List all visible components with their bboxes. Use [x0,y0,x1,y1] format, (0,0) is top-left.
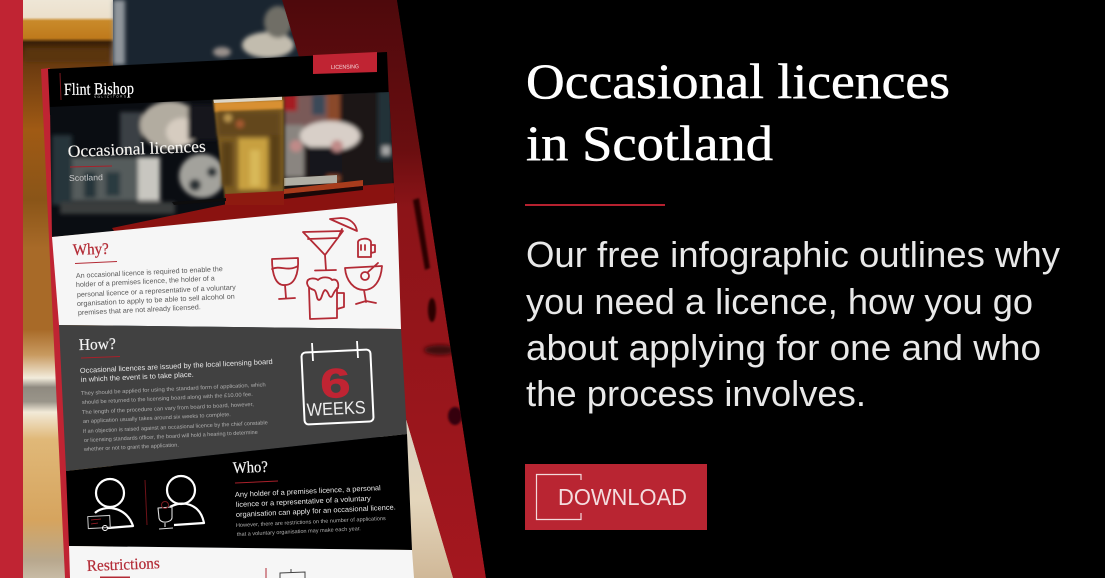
divider [145,480,147,525]
description text: you need a licence, how you go [526,281,1033,322]
description text: Our free infographic outlines why [526,234,1060,275]
infographic document preview [41,52,414,578]
how detail text: If an objection is raised against an occasional licence by the chief constable [83,420,268,435]
heading: who: Who? [233,459,268,477]
why body text: personal licence or a representative of a voluntary [77,284,236,299]
logo: Flint Bishop [60,73,134,100]
how detail text: or licensing standards officer, the board will hold a hearing to determine [84,430,258,444]
red accent lines in document [75,262,278,483]
why body text: organisation to apply to be able to sell alcohol on [77,294,235,308]
how detail text [81,382,268,453]
why body text [76,266,236,317]
download button: DOWNLOAD [558,484,687,510]
who lead text [235,483,396,519]
background photo: pub scene with beer [23,0,483,578]
why body text: premises that are not already licensed. [78,304,201,317]
left red band [0,0,23,578]
description text: about applying for one and who [526,327,1041,368]
icon: calendar six weeks: WEEKS [306,397,366,420]
document black header [48,52,389,115]
who lead text: licence or a representative of a voluntary [236,494,371,509]
panel: restrictions [69,546,414,578]
how detail text: an application usually takes around six weeks to complete. [83,412,231,425]
panel: who [66,434,412,550]
diagonal dark red band [282,0,486,578]
panel: why [52,203,401,329]
description text: the process involves. [526,373,866,414]
icon: person with goblet [158,476,204,529]
title divider [525,204,665,206]
why body text: holder of a premises licence, the holder of a [76,275,215,289]
how lead text: in which the event is to take place. [81,370,194,384]
who detail text: that a voluntary organisation may make each year. [237,526,361,538]
heading: how: How? [79,336,116,354]
hero title: Occasional licences [67,137,206,161]
licensing tag: LICENSING [331,64,359,71]
heading: restrictions: Restrictions [87,555,160,575]
hero title [67,137,206,183]
logo: Flint Bishop: SOLICITORS [94,94,126,99]
icon: drinks group [272,218,382,319]
icon: calendar six weeks: 6 [319,360,351,407]
main title: Occasional licences [526,53,950,109]
hero photo [45,85,400,240]
panel: how [59,325,407,471]
hero title: Scotland [69,172,103,183]
how detail text: whether or not to grant the application. [83,443,179,453]
icon: person with certificate [88,479,133,530]
main title: in Scotland [526,115,773,171]
who lead text: Any holder of a premises licence, a personal [235,483,381,499]
download button [525,464,707,530]
who detail text: However, there are restrictions on the number of applications [236,516,386,529]
how detail text: They should be applied for using the standard form of application, which [81,382,266,397]
how detail text: The length of the procedure can vary from board to board, however, [82,402,254,416]
who detail text [236,516,386,538]
how lead text: Occasional licences are issued by the local licensing board [80,357,273,375]
who lead text: organisation can apply for an occasional licence. [236,502,396,519]
licensing tag [313,52,377,74]
how lead text [80,357,273,384]
heading: why: Why? [73,241,109,259]
logo: Flint Bishop: Flint Bishop [64,79,134,99]
why body text: An occasional licence is required to enable the [76,266,223,280]
icon: calendar six weeks [301,341,374,425]
how detail text: should be returned to the licensing board along with the £10.00 fee. [82,392,253,406]
document red left edge [41,68,72,578]
